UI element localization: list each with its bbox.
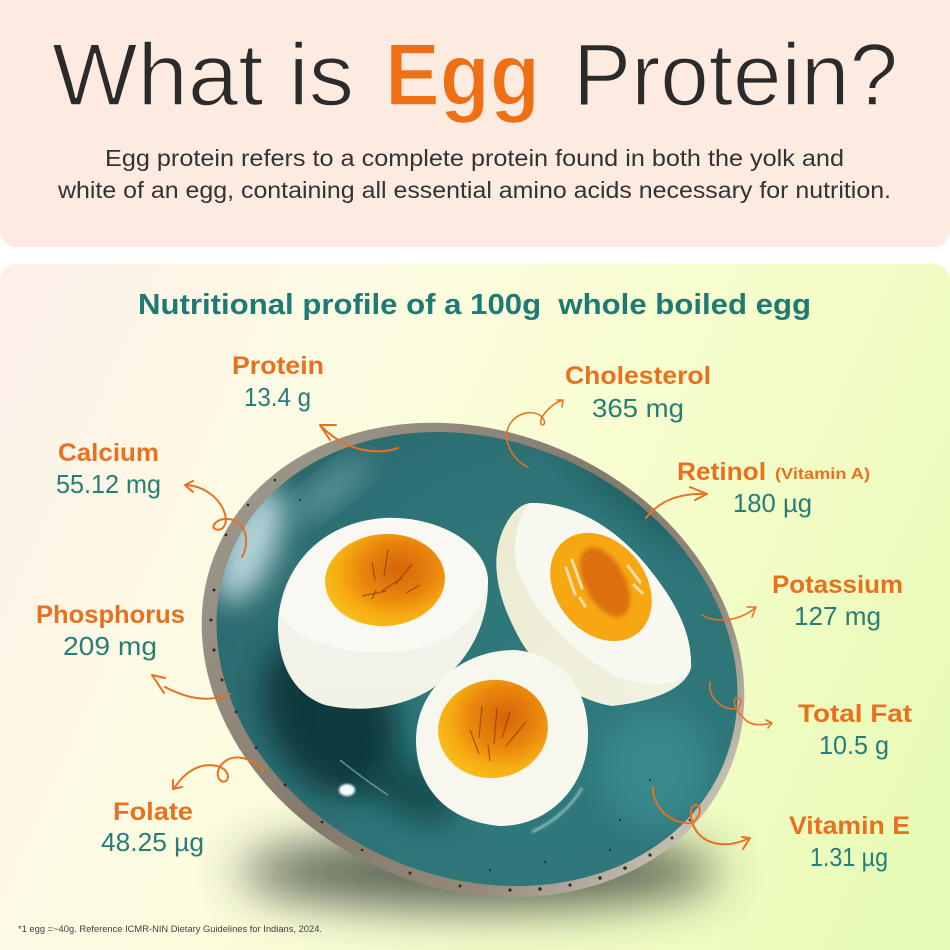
arrow: Cholesterol [507,400,563,467]
label: Protein [232,352,324,412]
arrow: Phosphorus [152,675,230,699]
intro text [57,145,891,203]
label: Protein: Protein [232,352,324,380]
arrow: Vitamin E [653,787,750,849]
intro text: Egg protein refers to a complete protein found in both the yolk and [105,145,844,171]
title: What is [52,25,354,124]
title: Protein? [573,25,898,124]
yolk [322,530,448,630]
label: Potassium [772,571,903,631]
label: Cholesterol [565,362,711,423]
arrow: Protein [320,425,398,451]
label: Potassium: Potassium [772,571,903,599]
label: Vitamin E: Vitamin E [789,812,910,840]
label: Phosphorus [36,601,185,661]
label: Retinol: (Vitamin A) [775,466,870,483]
plate illustration [202,423,744,897]
yolk [432,673,554,785]
label: Phosphorus: 209 mg [63,631,157,661]
yolk [529,513,673,661]
label: Cholesterol: 365 mg [592,393,684,423]
plate shadow [240,836,720,908]
arrow: Folate [173,757,263,789]
egg: right half [496,503,691,706]
plate glaze [217,432,737,886]
label: Potassium: 127 mg [794,601,881,631]
arrow: Calcium [185,481,246,557]
egg: bottom half [416,650,588,826]
plate speckles [210,479,691,892]
label: Calcium: 55.12 mg [56,469,161,499]
label: Vitamin E: 1.31 µg [810,842,888,872]
label: Protein: 13.4 g [244,382,311,412]
label: Total Fat: Total Fat [798,700,913,728]
nutrition panel background [0,264,950,950]
intro text: white of an egg, containing all essential amino acids necessary for nutrition. [57,177,891,203]
label: Retinol [677,458,870,518]
arrow: Retinol [646,487,707,518]
label: Cholesterol: Cholesterol [565,362,711,390]
label: Phosphorus: Phosphorus [36,601,185,629]
label: Folate: Folate [113,798,193,826]
header panel [0,0,950,247]
label: Vitamin E [789,812,910,872]
arrow: Potassium [702,607,756,620]
label: Total Fat: 10.5 g [819,730,889,760]
arrow: Total Fat [710,682,772,728]
plate sparkle [339,784,355,796]
footnote: *1 egg =~40g. Reference ICMR-NIN Dietary Guidelines for Indians, 2024. [18,924,322,935]
label: Retinol: 180 µg [733,488,812,518]
label: Retinol: Retinol [677,458,766,486]
plate shading [203,433,718,835]
label: Total Fat [798,700,913,760]
plate rim [202,423,744,897]
label: Calcium [56,439,161,499]
title [52,25,898,124]
label: Folate [101,798,204,857]
title: Egg [385,25,540,124]
label: Folate: 48.25 µg [101,827,204,857]
panel heading: Nutritional profile of a 100g whole boiled egg [138,289,811,321]
egg: left half [278,518,488,709]
label: Calcium: Calcium [58,439,159,467]
